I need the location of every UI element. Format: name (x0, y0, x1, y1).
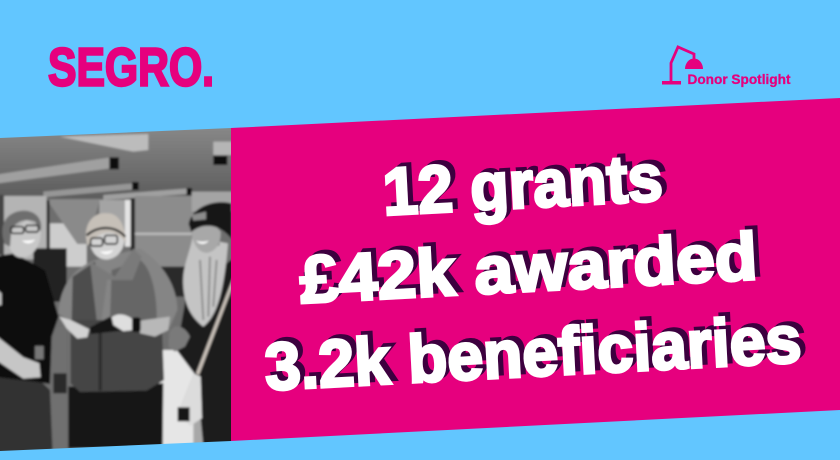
stats text with dark drop shadow (263, 136, 808, 405)
photo: three smiling people in a room (greyscale) (0, 128, 231, 451)
label: Donor Spotlight: Donor Spotlight (688, 71, 791, 87)
stat line: 12 grants: 12 grants (381, 140, 664, 230)
stat line: 3.2k beneficiaries: 3.2k beneficiaries (268, 298, 808, 401)
window wall (0, 196, 47, 259)
person: left, black t-shirt and glasses (0, 211, 59, 453)
person: right, long blonde hair and dark beanie (169, 200, 231, 442)
logo: SEGRO: SEGRO. (48, 38, 214, 98)
stat line: 12 grants: 12 grants (386, 136, 669, 226)
stat line: £42k awarded: £42k awarded (303, 215, 764, 314)
stat line: £42k awarded: £42k awarded (298, 219, 759, 318)
panel: pink stats band (231, 98, 840, 441)
person: centre, beanie, glasses and padded vest (58, 213, 177, 448)
stat line: 3.2k beneficiaries: 3.2k beneficiaries (263, 302, 803, 405)
icon: desk lamp (662, 47, 703, 84)
